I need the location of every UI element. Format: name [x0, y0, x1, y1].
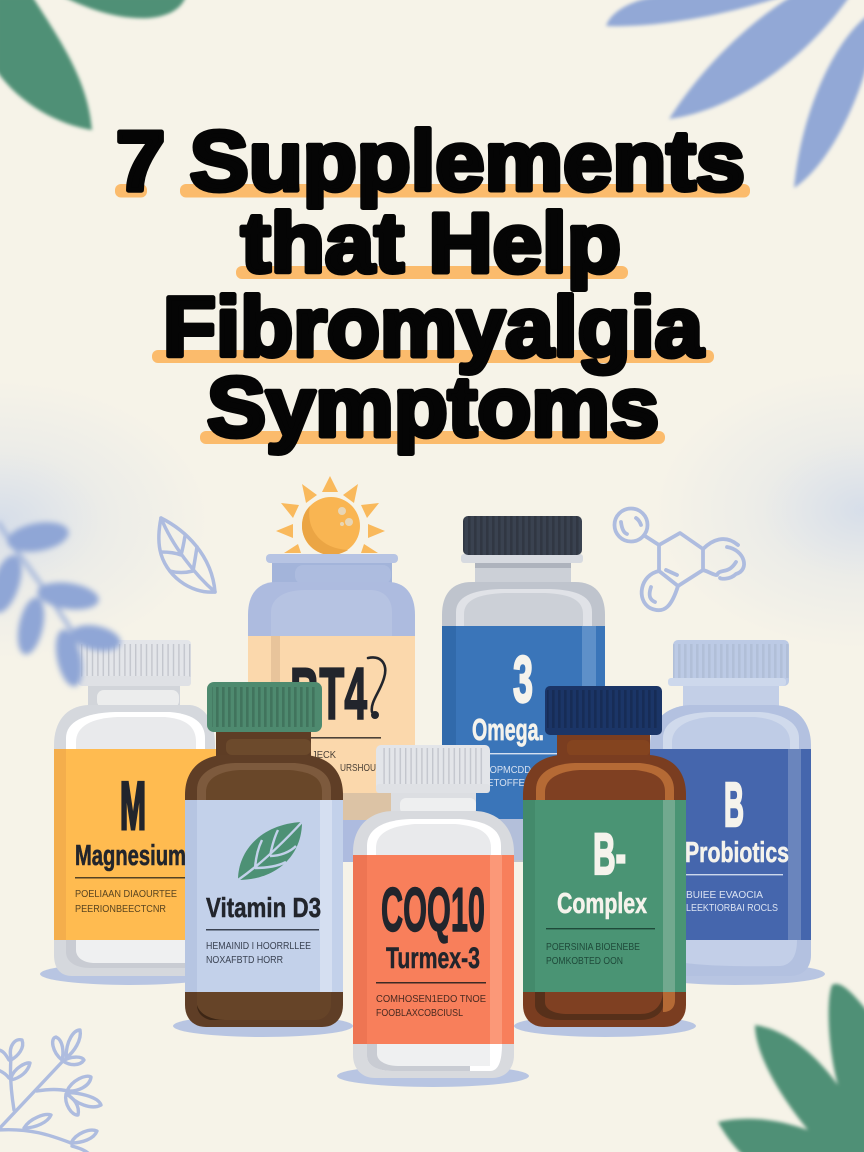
label text: Turmex-3: Turmex-3 [386, 942, 480, 975]
decorative sprig: left blue blurred [0, 518, 123, 689]
title line 3: Fibromyalgia [163, 280, 704, 374]
bottle: Magnesium: M [120, 768, 146, 844]
bottle: Omega: ETOFFE [487, 777, 525, 789]
title line 2: that Help [241, 196, 621, 290]
bottle: B-Complex [523, 686, 686, 1027]
bottle: Vitamin D3: NOXAFBTD HORR [206, 954, 283, 966]
bottle: Probiotics: BUIEE EVAOCIA [686, 889, 763, 901]
bottle: B-Complex: POERSINIA BIOENEBE [546, 941, 640, 953]
bottle shadow: CoQ10 [337, 1065, 529, 1087]
bottle: Probiotics: B [724, 771, 744, 840]
icon: squiggle mark [368, 657, 385, 719]
bottle: CoQ10 [353, 745, 514, 1078]
label text: Complex: Complex [557, 888, 647, 920]
title line 1: 7 Supplements [116, 114, 745, 208]
label text: BT4: BT4 [290, 654, 367, 735]
bottle: BT4: JECK [312, 749, 336, 761]
bottle: B-Complex: POMKOBTED OON [546, 955, 623, 967]
bottle shadow: Magnesium [40, 963, 220, 985]
bottle: Probiotics [650, 640, 811, 976]
bottle: Magnesium [54, 640, 216, 976]
icon: sun [276, 476, 385, 555]
title line 4: Symptoms [207, 360, 659, 454]
bottle: Omega [442, 516, 605, 862]
bottle: Vitamin D3: HEMAINID I HOORRLLEE [206, 940, 311, 952]
decorative leaves: top left green [0, 0, 186, 130]
label text: Magnesium: Magnesium [75, 840, 186, 872]
title highlight bars [115, 184, 750, 444]
bottle: Vitamin D3 [185, 682, 343, 1027]
bottle: BT4 [248, 554, 415, 862]
label text: B-: B- [593, 822, 626, 887]
bottle: Magnesium: POELIAAN DIAOURTEE [75, 888, 177, 900]
bottle: Omega: IOPMCDD [487, 764, 531, 776]
icon: outline leaf [159, 518, 215, 592]
icon: molecule [614, 508, 744, 610]
bottle: BT4: URSHOU [340, 762, 376, 774]
bottle: Probiotics: LEEKTIORBAI ROCLS [686, 902, 778, 914]
label text: Probiotics: Probiotics [685, 837, 789, 869]
icon: outline sprig bottom left [0, 1030, 101, 1152]
label text: 3: 3 [513, 642, 533, 716]
decorative leaves: top right blue [606, 0, 864, 188]
bottle shadow: Vitamin D3 [173, 1015, 353, 1037]
bottle: CoQ10: COMHOSEN1EDO TNOE [376, 993, 486, 1005]
bottle: CoQ10: FOOBLAXCOBCIUSL [376, 1007, 463, 1019]
label text: Vitamin D3: Vitamin D3 [206, 892, 321, 923]
bottle shadow: B-Complex [514, 1015, 696, 1037]
label text: Omega: Omega. [472, 712, 544, 747]
bottle: CoQ10: COQ10 [381, 876, 485, 945]
title [115, 114, 750, 454]
icon: green leaf [238, 822, 302, 880]
decorative leaves: bottom right green [718, 984, 864, 1152]
bottle shadow: Probiotics [645, 963, 825, 985]
bottle: Magnesium: PEERIONBEECTCNR [75, 903, 166, 915]
